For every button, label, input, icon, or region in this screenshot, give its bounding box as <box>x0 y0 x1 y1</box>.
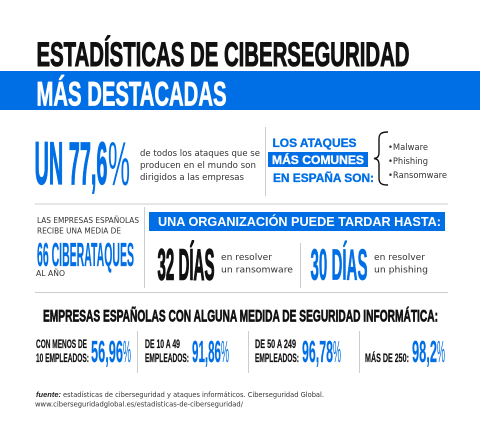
title: second line: MÁS DESTACADAS <box>36 76 227 114</box>
attack list: •Phishing <box>388 157 428 167</box>
stat: 30 days <box>310 240 428 290</box>
panel: 66 cyberattacks: LAS EMPRESAS ESPAÑOLAS <box>37 215 139 225</box>
stat: 30 days: 30 DÍAS <box>310 240 368 290</box>
text: % <box>333 334 341 369</box>
panel: 66 cyberattacks <box>36 215 139 278</box>
text: UN 77,6 <box>34 130 108 197</box>
stat: 30 days: en resolver <box>374 253 425 263</box>
stat: under 10 employees: 56,96 <box>91 334 123 369</box>
stat description: producen en el mundo son <box>140 161 256 171</box>
title band <box>0 71 480 114</box>
stat: 32 days: en resolver <box>221 253 272 263</box>
stat: 50 to 249 employees: 96,78 <box>302 334 333 369</box>
stat: 10 to 49 employees <box>145 334 229 369</box>
stat: 10 to 49 employees: EMPLEADOS: <box>145 351 189 365</box>
stat: 77,6 percent <box>34 130 130 199</box>
stat: under 10 employees: 10 EMPLEADOS: <box>36 351 89 365</box>
stat description <box>140 149 260 183</box>
text: % <box>123 334 131 369</box>
attack list <box>388 143 447 181</box>
text: % <box>437 334 445 369</box>
stat description: dirigidos a las empresas <box>140 173 244 183</box>
text: % <box>108 130 130 199</box>
text: % <box>221 334 229 369</box>
panel: 66 cyberattacks: AL AÑO <box>36 268 65 278</box>
stat: under 10 employees <box>36 334 131 369</box>
stat: 10 to 49 employees: DE 10 A 49 <box>145 337 180 351</box>
icon: brace <box>374 132 388 185</box>
panel: most common attacks: MÁS COMUNES <box>272 152 364 167</box>
stat: 50 to 249 employees: DE 50 A 249 <box>255 337 296 351</box>
stat: over 250 employees <box>365 334 445 369</box>
source note: estadísticas de ciberseguridad y ataques informáticos. Ciberseguridad Global. <box>63 391 324 399</box>
stat: over 250 employees: 98,2 <box>412 334 437 369</box>
panel: most common attacks: LOS ATAQUES <box>272 136 356 150</box>
banner: organization time: UNA ORGANIZACIÓN PUEDE TARDAR HASTA: <box>158 214 441 229</box>
stat: under 10 employees: CON MENOS DE <box>36 337 87 351</box>
attack list: •Malware <box>388 143 428 153</box>
attack list: •Ransomware <box>388 171 447 181</box>
panel: 66 cyberattacks: RECIBE UNA MEDIA DE <box>37 226 121 236</box>
panel: most common attacks <box>268 132 447 185</box>
stat: over 250 employees: MÁS DE 250: <box>365 350 409 365</box>
source note: www.ciberseguridadglobal.es/estadisticas-de-ciberseguridad/ <box>35 400 244 408</box>
stat: 32 days: un ransomware <box>221 266 293 276</box>
stat: 32 days: 32 DÍAS <box>158 240 214 290</box>
stat: 30 days: un phishing <box>374 266 428 276</box>
text: 91,86 <box>192 334 221 369</box>
source note <box>35 390 324 408</box>
stat: 50 to 249 employees: EMPLEADOS: <box>255 351 299 365</box>
stat: 50 to 249 employees <box>255 334 341 369</box>
text: 66 CIBERATAQUES <box>37 236 134 273</box>
panel: most common attacks: EN ESPAÑA SON: <box>273 170 374 185</box>
stat description: de todos los ataques que se <box>140 149 260 159</box>
source note: fuente: <box>36 390 62 399</box>
